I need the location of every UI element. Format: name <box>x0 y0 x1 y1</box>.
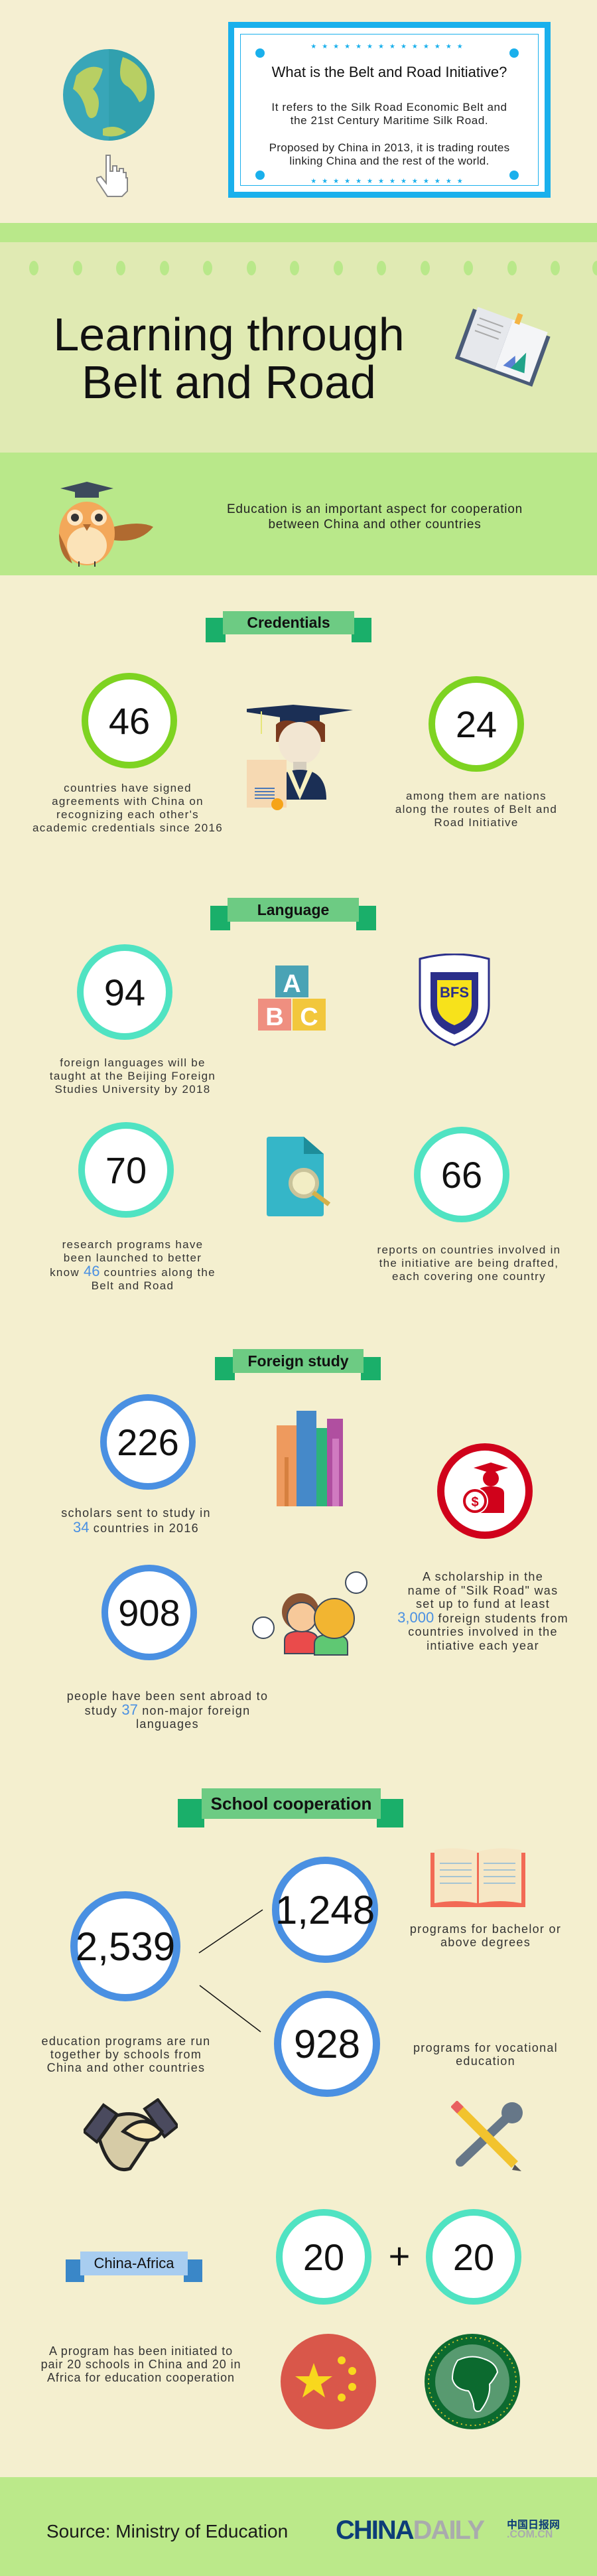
ribbon: Language: Language <box>257 901 329 918</box>
ribbon: Foreign study: Foreign study <box>247 1352 349 1370</box>
stat: 1,248: 1,248 <box>275 1887 375 1932</box>
callout: what is belt and road: ★★★★★★★★★★★★★★ <box>310 178 468 185</box>
ribbon: Language <box>210 898 376 930</box>
text: 94: foreign languages will be <box>60 1056 206 1069</box>
text: scholarship: intiative each year <box>427 1639 539 1652</box>
ribbon: School cooperation <box>178 1788 403 1827</box>
text: 66: the initiative are being drafted, <box>379 1257 559 1269</box>
text: 94: Studies University by 2018 <box>54 1083 211 1096</box>
title: Learning through <box>53 309 405 360</box>
text: 24 <box>395 790 557 829</box>
icon: scholarship <box>437 1443 533 1539</box>
stat: 94 <box>77 944 172 1040</box>
intro text <box>227 502 523 532</box>
text: 908: study 37 non-major foreign <box>85 1701 250 1717</box>
text: 226: 34 countries in 2016 <box>73 1519 199 1536</box>
text: 70: Belt and Road <box>92 1279 174 1292</box>
stat: 24 <box>429 676 524 772</box>
text: 66: reports on countries involved in <box>377 1244 561 1256</box>
stat: 66: 66 <box>441 1153 482 1196</box>
callout: what is belt and road: What is the Belt and Road Initiative? <box>272 64 507 80</box>
ribbon: Foreign study <box>215 1349 381 1380</box>
source text: Source: Ministry of Education <box>46 2521 288 2541</box>
text: 1,248: above degrees <box>440 1936 531 1949</box>
plus sign: + <box>389 2235 410 2277</box>
icon: BFSU logo: BFS <box>440 984 469 1001</box>
stat: 2,539 <box>70 1891 180 2001</box>
text: scholarship: name of "Silk Road" was <box>408 1583 558 1597</box>
intro text: Education is an important aspect for cooperation <box>227 502 523 516</box>
callout: what is belt and road: ★★★★★★★★★★★★★★ <box>310 43 468 50</box>
text: 908 <box>67 1689 268 1731</box>
stat: 46 <box>82 673 177 768</box>
icon: document search <box>267 1137 330 1216</box>
text: 70: research programs have <box>62 1238 203 1251</box>
title <box>53 309 405 408</box>
text: 46: recognizing each other's <box>56 808 199 821</box>
text: 2,539: China and other countries <box>47 2061 205 2074</box>
logo: China Daily: 中国日报网 <box>507 2520 560 2531</box>
logo: China Daily <box>336 2516 560 2545</box>
text: 46: academic credentials since 2016 <box>33 822 223 834</box>
stat: 908: 908 <box>118 1591 180 1634</box>
icon: scholarship: $ <box>471 1495 479 1510</box>
text: 226: scholars sent to study in <box>61 1506 211 1520</box>
text: 226 <box>61 1506 211 1536</box>
stat: 226: 226 <box>117 1421 179 1463</box>
icon: ABC blocks: A <box>283 970 301 998</box>
callout: what is belt and road: linking China and the rest of the world. <box>289 155 490 167</box>
stat: 46: 46 <box>109 699 150 742</box>
icon: ABC blocks: C <box>300 1003 318 1031</box>
text: China-Africa: Africa for education cooperation <box>47 2371 235 2384</box>
text: 928: education <box>456 2054 515 2068</box>
ribbon: School cooperation: School cooperation <box>211 1793 371 1813</box>
text: 70: been launched to better <box>64 1252 202 1264</box>
icon: handshake <box>84 2098 178 2171</box>
stat: 928: 928 <box>294 2021 360 2066</box>
text: 2,539: education programs are run <box>42 2035 210 2048</box>
text: 46: countries have signed <box>64 782 192 794</box>
stat: 20 China <box>276 2209 371 2305</box>
text: 70: know 46 countries along the <box>50 1263 216 1279</box>
ribbon: Credentials <box>206 611 371 642</box>
text: scholarship: countries involved in the <box>408 1625 558 1638</box>
text: scholarship: set up to fund at least <box>416 1597 550 1610</box>
text: 94 <box>50 1056 216 1096</box>
text: 66: each covering one country <box>392 1270 546 1283</box>
ribbon: Credentials: Credentials <box>247 614 330 631</box>
text: 46 <box>33 782 223 834</box>
logo: China Daily: CHINADAILY <box>336 2516 484 2545</box>
background cream top <box>0 0 597 223</box>
text: scholarship: A scholarship in the <box>423 1570 543 1583</box>
icon: BFSU logo <box>419 954 490 1046</box>
icon: owl <box>59 482 153 567</box>
text: 908: people have been sent abroad to <box>67 1689 268 1703</box>
logo: China Daily: .COM.CN <box>507 2529 553 2540</box>
icon: books <box>277 1411 343 1506</box>
stat: 20 Africa <box>426 2209 521 2305</box>
text: China-Africa: pair 20 schools in China and 20 in <box>41 2358 241 2371</box>
stat: 2,539: 2,539 <box>76 1924 175 1968</box>
stripe green <box>0 223 597 242</box>
title: Belt and Road <box>82 356 376 408</box>
text: China-Africa <box>41 2344 241 2384</box>
footer band <box>0 2477 597 2576</box>
icon: globe <box>63 49 155 141</box>
stat: 70: 70 <box>105 1149 147 1190</box>
callout: what is belt and road <box>228 22 551 198</box>
stat: 908 <box>101 1565 197 1660</box>
text: 24: among them are nations <box>406 790 547 802</box>
text: 46: agreements with China on <box>52 795 204 808</box>
icon: hand cursor <box>96 155 128 197</box>
stat: 20 Africa: 20 <box>453 2236 494 2277</box>
text: 94: taught at the Beijing Foreign <box>50 1070 216 1082</box>
icon: book <box>455 307 551 387</box>
text: 1,248 <box>410 1922 561 1949</box>
callout: what is belt and road: the 21st Century Maritime Silk Road. <box>291 114 488 127</box>
stat: 70 <box>78 1122 174 1218</box>
title band <box>0 242 597 453</box>
text: 928 <box>413 2041 558 2068</box>
text: 908: languages <box>136 1717 199 1731</box>
icon: China flag <box>281 2334 376 2429</box>
stat: 1,248 <box>272 1857 378 1963</box>
text: scholarship: 3,000 foreign students from <box>397 1609 568 1626</box>
text: 24: Road Initiative <box>434 816 519 829</box>
stat: 928 <box>274 1991 380 2097</box>
icon: African Union emblem <box>425 2334 520 2429</box>
icon: tools <box>451 2101 523 2171</box>
intro text: between China and other countries <box>268 518 482 532</box>
ribbon: China-Africa: China-Africa <box>94 2255 174 2271</box>
icon: ABC blocks <box>258 966 326 1031</box>
text: 1,248: programs for bachelor or <box>410 1922 561 1936</box>
ribbon: China-Africa <box>66 2252 202 2282</box>
stat: 66 <box>414 1127 509 1222</box>
connector lines <box>199 1909 263 2033</box>
icon: ABC blocks: B <box>265 1003 284 1031</box>
text: scholarship <box>397 1570 568 1652</box>
callout: what is belt and road: Proposed by China in 2013, it is trading routes <box>269 141 509 154</box>
icon: open book <box>431 1849 525 1907</box>
stat: 226 <box>100 1394 196 1490</box>
stat: 24: 24 <box>456 703 497 745</box>
callout: what is belt and road: It refers to the Silk Road Economic Belt and <box>271 101 507 113</box>
text: 66 <box>377 1244 561 1283</box>
stat: 20 China: 20 <box>303 2236 344 2277</box>
text: 928: programs for vocational <box>413 2041 558 2054</box>
icon: people talking <box>252 1571 367 1656</box>
icon: graduate <box>247 705 353 810</box>
text: 2,539: together by schools from <box>50 2048 202 2061</box>
intro band <box>0 453 597 575</box>
text: China-Africa: A program has been initiated to <box>49 2344 233 2358</box>
text: 70 <box>50 1238 216 1292</box>
text: 2,539 <box>42 2035 210 2074</box>
text: 24: along the routes of Belt and <box>395 803 557 816</box>
stat: 94: 94 <box>104 971 145 1013</box>
